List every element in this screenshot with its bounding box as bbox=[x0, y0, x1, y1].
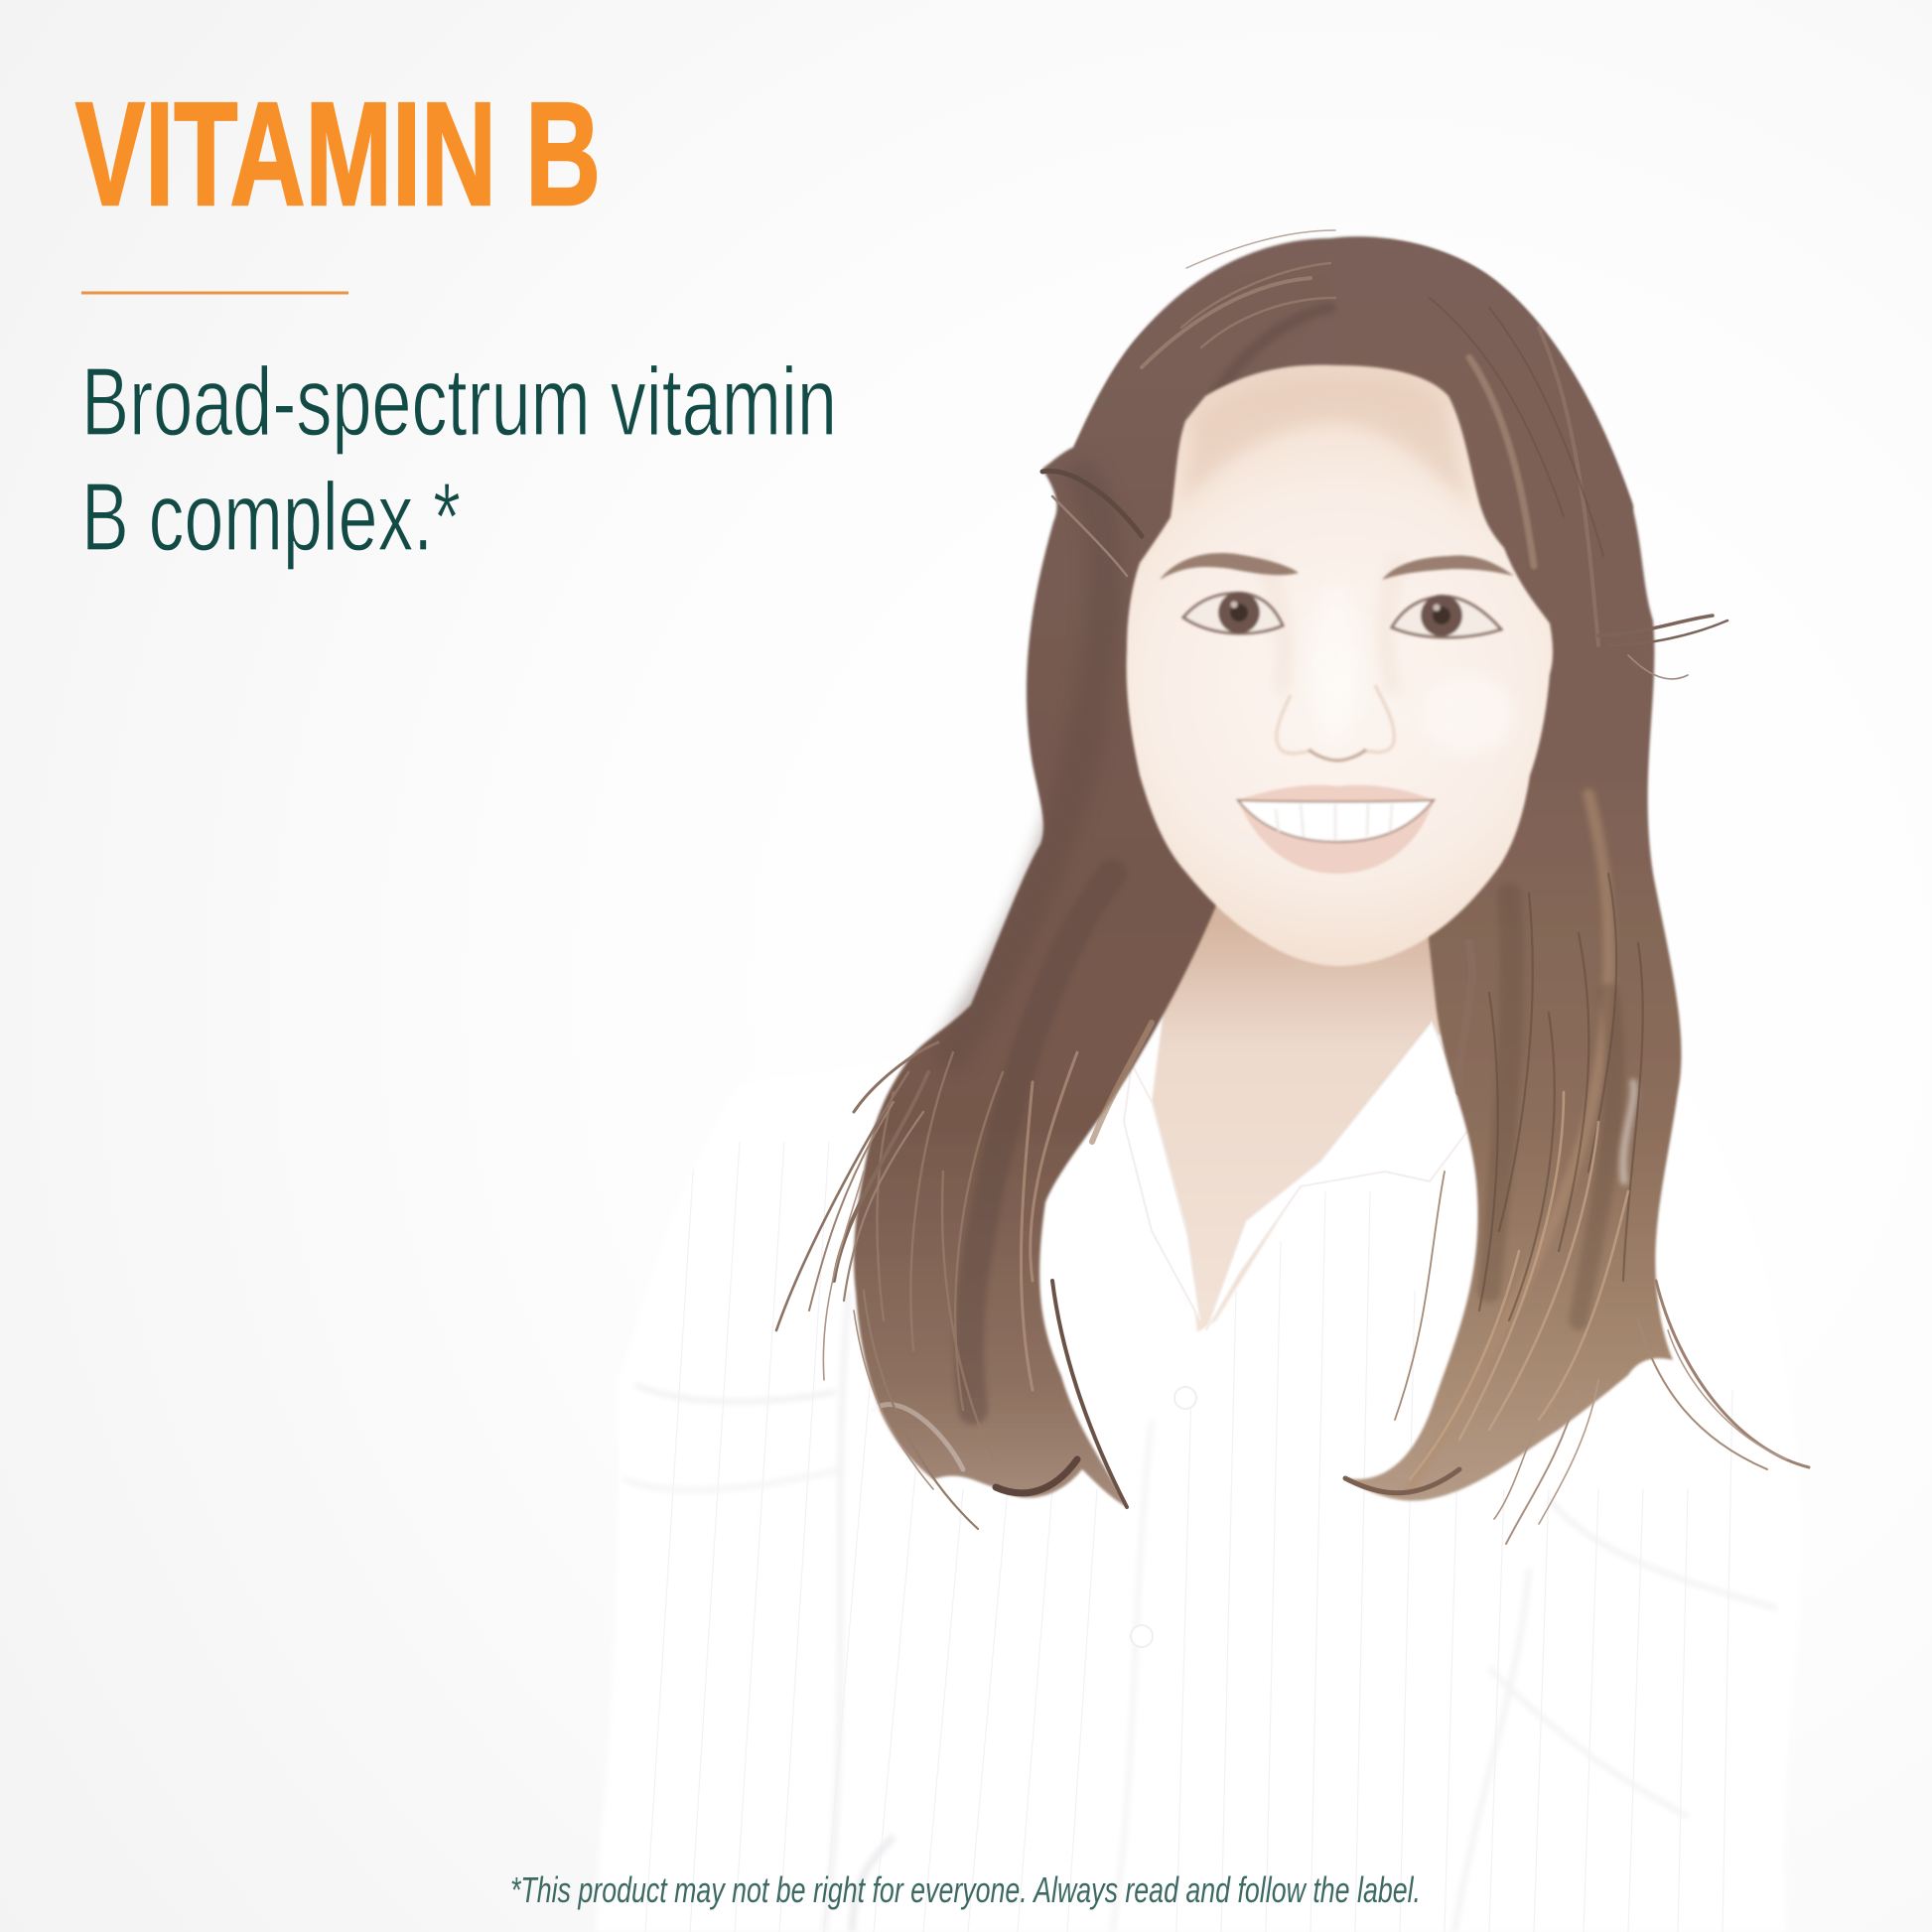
subtitle text: Broad-spectrum vitamin bbox=[81, 347, 837, 456]
shirt buttons bbox=[1131, 1387, 1196, 1647]
neck bbox=[1152, 874, 1489, 1332]
subtitle text: B complex.* bbox=[81, 463, 461, 571]
eyes bbox=[1183, 592, 1501, 637]
divider under title bbox=[81, 292, 348, 294]
nose bbox=[1277, 685, 1394, 760]
white shirt bbox=[657, 1142, 1733, 1932]
footnote disclaimer: *This product may not be right for everyone. Always read and follow the label. bbox=[510, 1869, 1421, 1910]
left hair bbox=[776, 230, 1337, 1529]
title: VITAMIN B bbox=[75, 72, 601, 236]
subtitle text bbox=[81, 347, 837, 571]
head hair cap bbox=[1074, 236, 1633, 695]
eyebrows bbox=[1160, 553, 1514, 580]
shirt collar bbox=[1124, 1023, 1474, 1330]
smile bbox=[1238, 785, 1434, 874]
right hair bbox=[1330, 239, 1809, 1544]
face bbox=[1127, 365, 1553, 966]
photo: smiling woman in white shirt bbox=[596, 230, 1809, 1932]
